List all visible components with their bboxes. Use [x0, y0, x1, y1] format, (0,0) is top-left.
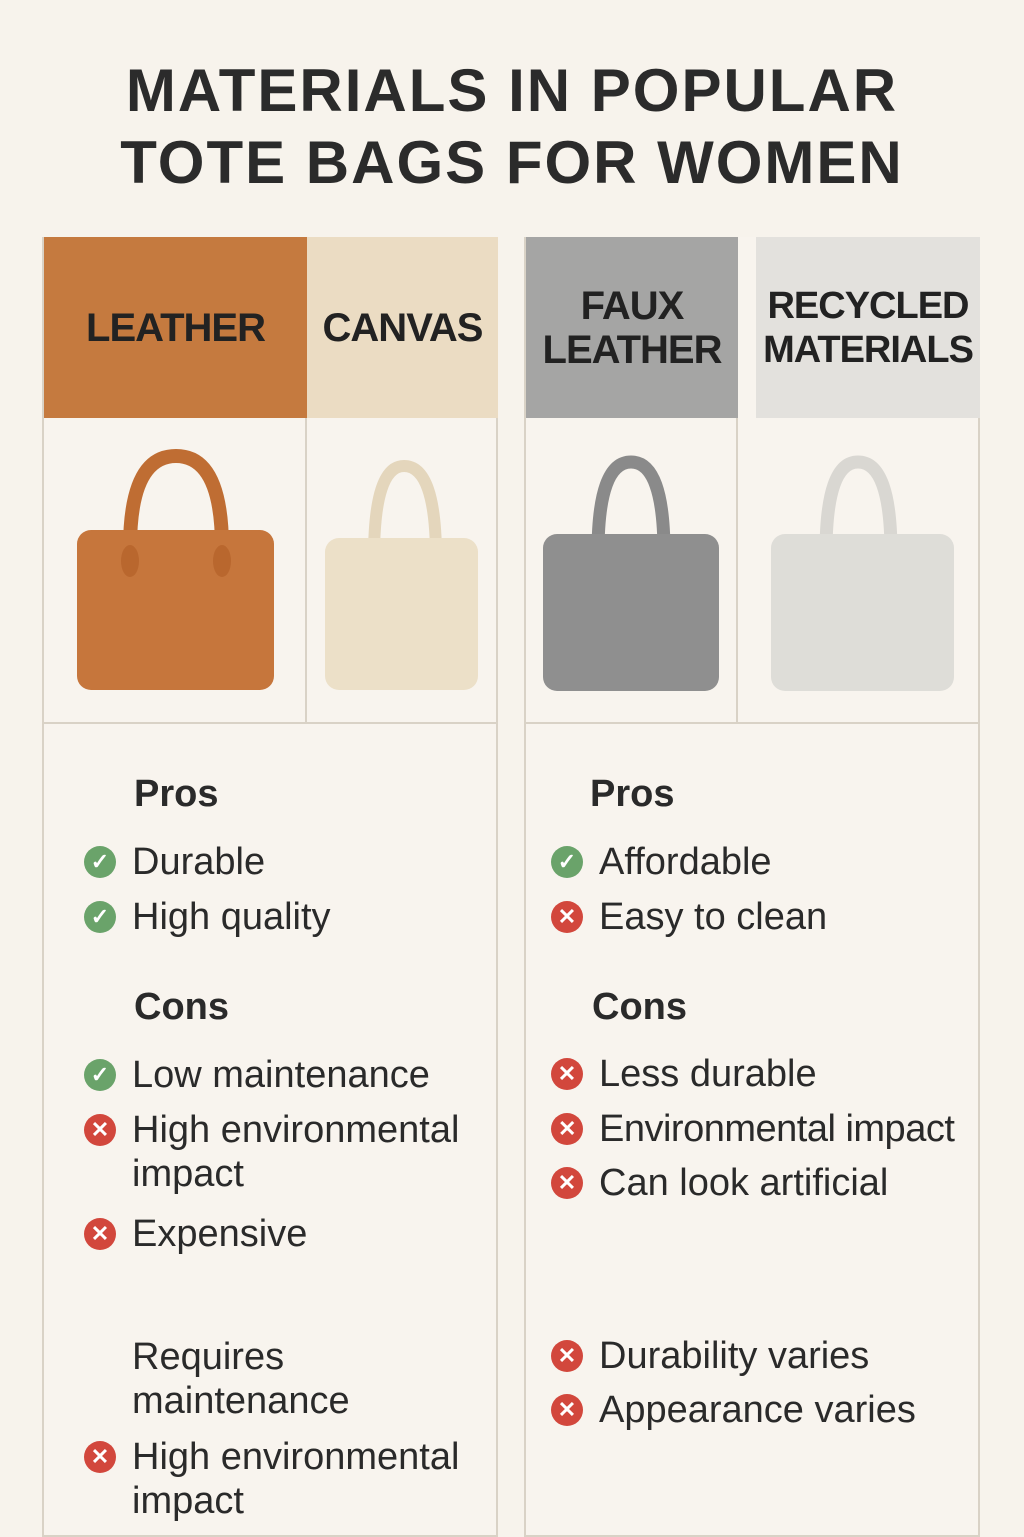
- header: recycled materials: MATERIALS: [763, 328, 973, 370]
- header: recycled materials: RECYCLED: [767, 284, 969, 326]
- panel: leather and canvas: ✓: [91, 1062, 109, 1087]
- pro item: high quality: High quality: [132, 896, 331, 938]
- panel: leather and canvas: ✕: [91, 1444, 109, 1469]
- pro item: durable: Durable: [132, 841, 265, 883]
- header: leather: [44, 237, 307, 418]
- title: [120, 57, 904, 196]
- header: faux leather: FAUX: [581, 284, 683, 328]
- panel: faux leather and recycled: ✕: [558, 1116, 576, 1141]
- cons heading: Cons: [592, 986, 687, 1028]
- panel: faux leather and recycled: [524, 237, 980, 1537]
- image cell: leather bag: [44, 418, 307, 724]
- title: MATERIALS IN POPULAR: [126, 57, 898, 124]
- panel: leather and canvas: ✓: [91, 904, 109, 929]
- panel: faux leather and recycled: ✕: [558, 1397, 576, 1422]
- con item: high environmental impact: High environmental impact: [132, 1109, 459, 1195]
- image cell: faux bag: [526, 418, 738, 724]
- con item: can look artificial: Can look artificial: [599, 1162, 888, 1204]
- panel: faux leather and recycled: ✕: [558, 1343, 576, 1368]
- panel: leather and canvas: [42, 237, 498, 1537]
- cons heading: Cons: [134, 986, 229, 1028]
- pro item: easy to clean: Easy to clean: [599, 896, 827, 938]
- header: faux leather: LEATHER: [543, 328, 721, 372]
- con item: less durable: Less durable: [599, 1053, 817, 1095]
- text: requires maintenance: Requires maintenance: [132, 1336, 350, 1422]
- pros heading: Pros: [134, 773, 218, 815]
- con item: expensive: Expensive: [132, 1213, 307, 1255]
- panel: leather and canvas: ✓: [91, 849, 109, 874]
- pros heading: Pros: [590, 773, 674, 815]
- con item: appearance varies: Appearance varies: [599, 1389, 916, 1431]
- panel: faux leather and recycled: ✕: [558, 1170, 576, 1195]
- image cell: recycled bag: [738, 418, 980, 724]
- panel: faux leather and recycled: ✕: [558, 1061, 576, 1086]
- con item: environmental impact: Environmental impact: [599, 1108, 954, 1150]
- header: canvas: [307, 237, 498, 418]
- header: recycled materials: [756, 237, 980, 418]
- header: canvas: CANVAS: [323, 306, 482, 350]
- con item: high environmental impact 2: High environmental impact: [132, 1436, 459, 1522]
- panel: leather and canvas: ✕: [91, 1221, 109, 1246]
- panel: faux leather and recycled: ✓: [558, 849, 576, 874]
- header: leather: LEATHER: [86, 306, 265, 350]
- pro item: affordable: Affordable: [599, 841, 772, 883]
- panel: faux leather and recycled: ✕: [558, 904, 576, 929]
- con item: durability varies: Durability varies: [599, 1335, 869, 1377]
- con item: low maintenance: Low maintenance: [132, 1054, 430, 1096]
- header: faux leather: [526, 237, 738, 418]
- panel: leather and canvas: ✕: [91, 1117, 109, 1142]
- image cell: canvas bag: [307, 418, 498, 724]
- title: TOTE BAGS FOR WOMEN: [120, 129, 904, 196]
